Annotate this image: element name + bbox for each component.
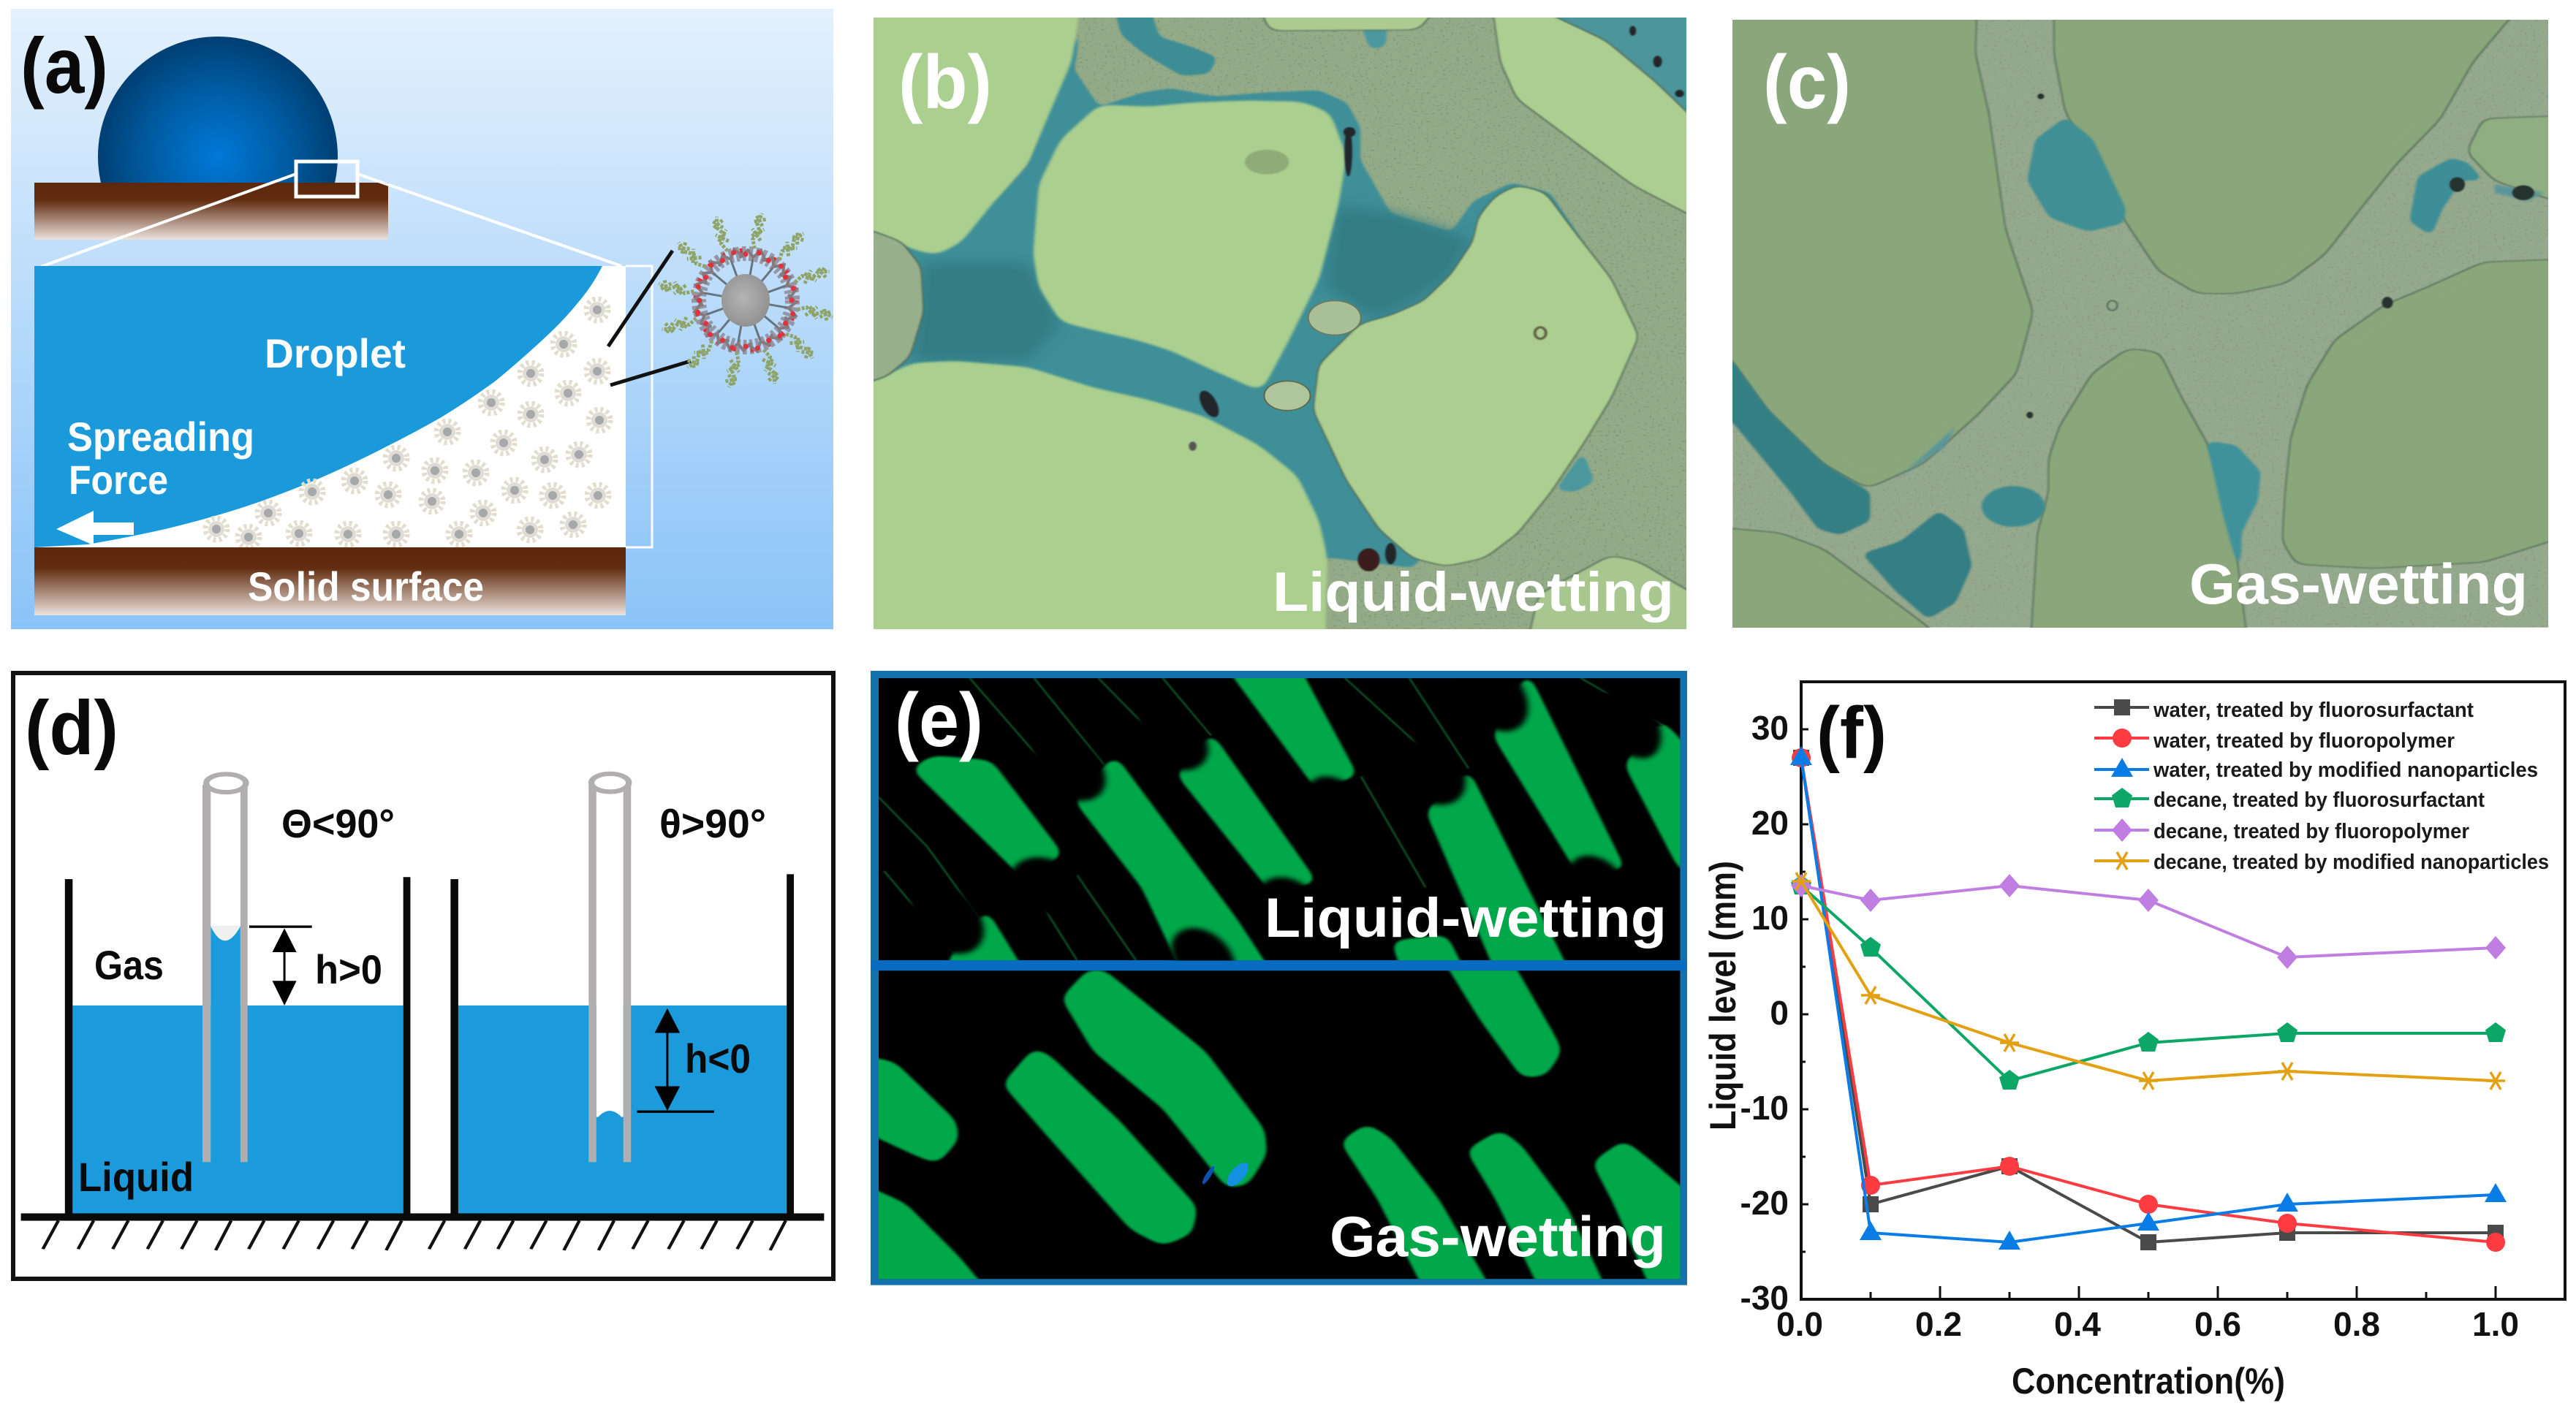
label (d): (d) xyxy=(25,685,118,771)
arrow: spreading force xyxy=(56,511,134,545)
text: Liquid-wetting (b): Liquid-wetting xyxy=(1273,561,1674,623)
micrograph frame and strips xyxy=(841,649,1720,1314)
icon: large modified nanoparticle xyxy=(656,211,835,389)
panel (b): liquid-wetting micrograph xyxy=(874,18,1686,629)
blue liquid blobs xyxy=(1686,117,2484,619)
x axis tick labels: 0.2 xyxy=(1915,1305,1962,1343)
arrow: h<0 xyxy=(637,1008,714,1113)
droplet sphere xyxy=(98,37,338,183)
text: Liquid: Liquid xyxy=(78,1154,194,1200)
text: Spreading: Spreading xyxy=(67,414,254,460)
x axis title: Concentration(%) xyxy=(2012,1361,2285,1402)
sand grains (left, centre, lower) xyxy=(874,18,1346,629)
x axis tick labels xyxy=(1776,1305,2519,1343)
liquid baths xyxy=(72,1006,787,1216)
text: Gas-wetting (c): Gas-wetting xyxy=(2189,552,2528,616)
text: Gas-wetting (e): Gas-wetting xyxy=(1330,1204,1666,1269)
adsorbed nanoparticles xyxy=(205,299,610,548)
y axis tick labels: 0 xyxy=(1770,994,1789,1032)
dark gas caps xyxy=(895,649,1673,995)
text: Gas: Gas xyxy=(94,942,164,988)
thin blue films xyxy=(1895,185,2544,480)
solid surface block xyxy=(34,547,626,615)
capillary tube 2 xyxy=(588,774,631,1162)
dark debris xyxy=(2026,94,2534,418)
zoom box and guide lines xyxy=(41,161,621,267)
micrograph (c) shapes xyxy=(1732,20,2548,628)
plot frame xyxy=(1801,682,2565,1299)
panel (f): liquid level line chart xyxy=(1702,682,2565,1402)
darker liquid pools xyxy=(912,205,1471,361)
series: decane, fluoropolymer xyxy=(1791,874,2506,969)
x axis tick labels: 0.6 xyxy=(2194,1305,2241,1343)
ground hatching xyxy=(43,1221,786,1250)
x axis tick labels: 0.0 xyxy=(1776,1305,1823,1343)
panel (e): fluorescence micrographs xyxy=(841,649,1720,1314)
panel (c): gas-wetting micrograph xyxy=(1732,20,2548,628)
series: water, modified nanoparticles xyxy=(1790,746,2507,1250)
series: water, fluorosurfactant xyxy=(1793,750,2504,1250)
series: decane, modified nanoparticles xyxy=(1792,873,2505,1090)
liquid-wetting channels xyxy=(879,649,1720,995)
x axis tick labels: 1.0 xyxy=(2472,1305,2519,1343)
panel (d): capillary rise schematic xyxy=(13,673,833,1279)
label (b): (b) xyxy=(898,40,992,125)
y axis tick labels: -20 xyxy=(1740,1184,1789,1222)
legend: water, treated by modified nanoparticles xyxy=(2153,759,2538,782)
text: h<0: h<0 xyxy=(685,1035,751,1082)
legend: decane, treated by modified nanoparticles xyxy=(2153,851,2549,874)
label (f): (f) xyxy=(1817,692,1887,774)
text: Liquid-wetting (e): Liquid-wetting xyxy=(1265,887,1667,949)
y axis tick labels: 20 xyxy=(1751,804,1789,842)
label (a): (a) xyxy=(20,21,108,110)
label (e): (e) xyxy=(895,678,983,763)
callout lines to nanoparticle xyxy=(608,251,691,385)
series: decane, fluorosurfactant xyxy=(1791,875,2506,1090)
solid substrate (small) xyxy=(34,183,388,240)
legend xyxy=(2094,699,2549,874)
text: contact angle below 90: Θ<90° xyxy=(281,801,395,846)
gas-wetting channels xyxy=(841,940,1720,1314)
legend: decane, treated by fluoropolymer xyxy=(2153,820,2469,843)
dark debris xyxy=(1189,26,1684,571)
thin film lines xyxy=(879,678,1667,960)
capillary schematic drawing xyxy=(21,774,824,1250)
capillary tube 1 xyxy=(202,774,248,1162)
legend: water, treated by fluoropolymer xyxy=(2153,729,2455,753)
micrograph (b) shapes xyxy=(874,18,1686,629)
text: Droplet: Droplet xyxy=(265,330,406,376)
container walls and ground xyxy=(21,874,824,1221)
small liquid patches xyxy=(1115,18,1686,493)
blue liquid network xyxy=(874,37,1584,569)
arrow: h>0 xyxy=(249,925,312,1006)
axis ticks xyxy=(1801,729,2496,1299)
y axis tick labels: 10 xyxy=(1751,899,1789,937)
x axis tick labels: 0.4 xyxy=(2054,1305,2101,1343)
green liquid bands xyxy=(911,662,1720,978)
pale trapped islands xyxy=(1264,300,1361,411)
panel (a): droplet spreading diagram xyxy=(11,9,835,629)
y axis tick labels: -10 xyxy=(1740,1089,1789,1127)
series: water, fluoropolymer xyxy=(1792,748,2505,1252)
legend: water, treated by fluorosurfactant xyxy=(2153,699,2474,722)
y axis tick labels xyxy=(1740,709,1789,1317)
y axis title: Liquid level (mm) xyxy=(1702,861,1743,1130)
text: Solid surface: Solid surface xyxy=(248,563,484,609)
y axis tick labels: -30 xyxy=(1740,1279,1789,1317)
panel a background xyxy=(11,9,833,629)
text: h>0: h>0 xyxy=(315,946,382,992)
label (c): (c) xyxy=(1763,40,1851,125)
grains xyxy=(1732,20,2548,628)
legend: decane, treated by fluorosurfactant xyxy=(2153,788,2485,812)
sand grains with dark rims xyxy=(874,18,1686,629)
text: contact angle above 90: θ>90° xyxy=(659,801,766,846)
text: Force: Force xyxy=(69,457,168,503)
y axis tick labels: 30 xyxy=(1751,709,1789,747)
magnified droplet region xyxy=(34,266,652,547)
x axis tick labels: 0.8 xyxy=(2333,1305,2380,1343)
panel d frame xyxy=(13,673,833,1279)
